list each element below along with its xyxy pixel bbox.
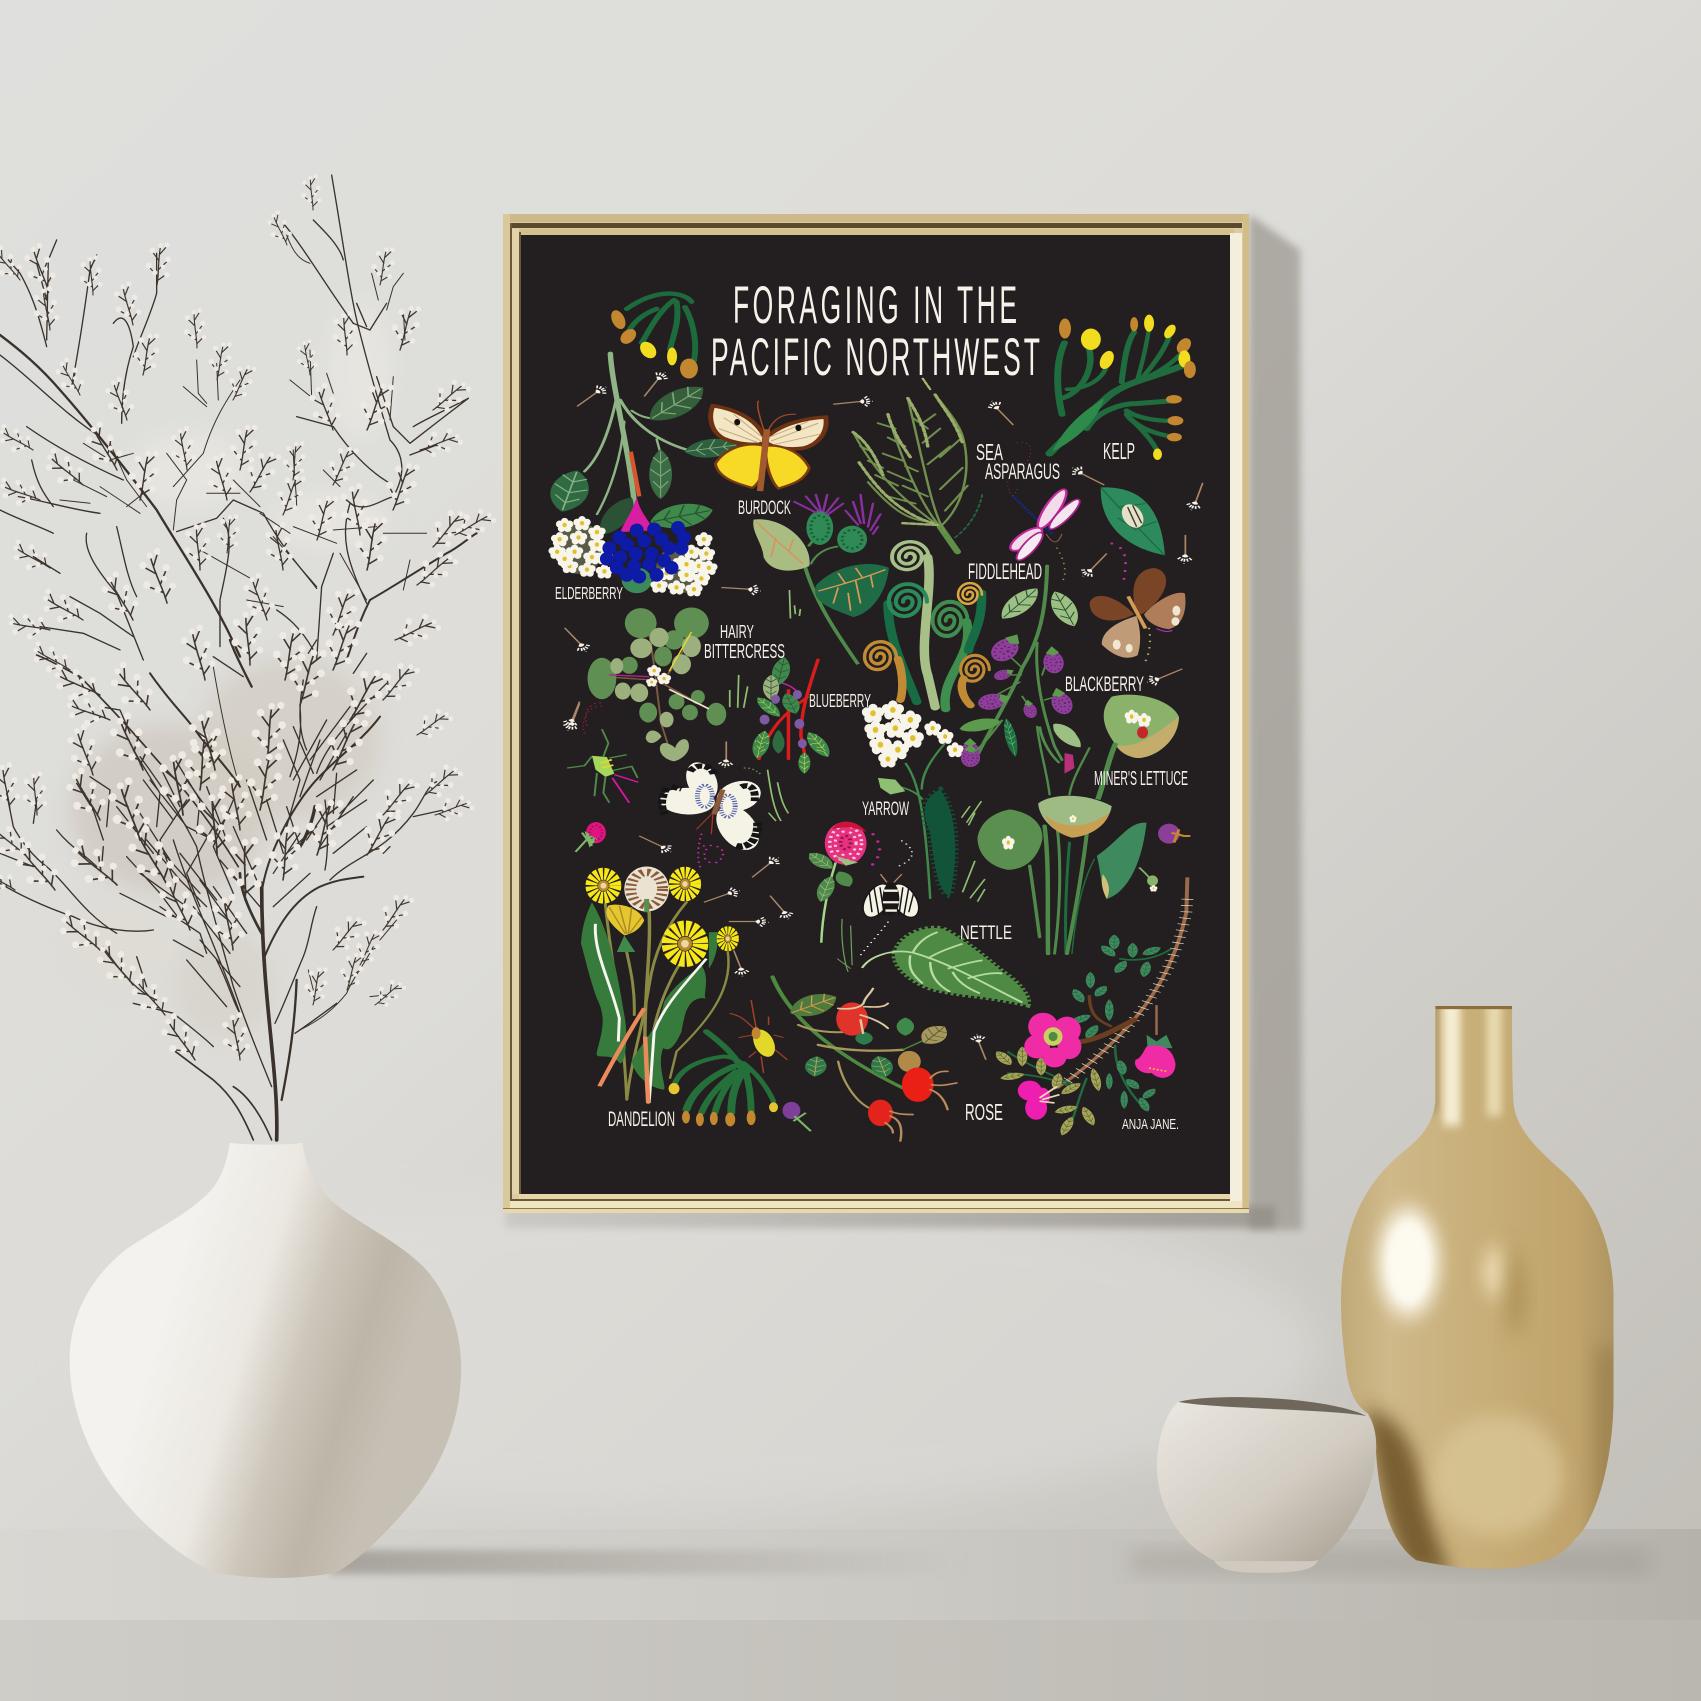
hairy bittercress (587, 607, 726, 760)
rose plant (992, 877, 1187, 1137)
plant name labels: BITTERCRESS (704, 641, 785, 663)
white elderflower clusters (548, 516, 718, 596)
blueberry lower leaves (753, 730, 832, 774)
poster title: FORAGING IN THE (733, 275, 1017, 334)
poster upper illustrations (544, 294, 1210, 761)
bowl and gold vase shelf shadow (1130, 1550, 1650, 1574)
kelp right (1050, 315, 1196, 460)
blue berries (600, 521, 691, 584)
brown butterfly (1090, 568, 1185, 658)
plant name labels: NETTLE (960, 923, 1012, 944)
berry by kelp (782, 1102, 811, 1131)
spider (562, 700, 638, 803)
bittercress heart leaf (641, 704, 726, 761)
pink trail dots upper (586, 442, 1150, 725)
poster title (711, 275, 1040, 386)
frame cast shadow (505, 214, 1302, 1230)
plant name labels (555, 438, 1188, 1133)
plant name labels: ROSE (965, 1099, 1003, 1125)
plant name labels: YARROW (862, 799, 909, 820)
upper branches (0, 175, 477, 660)
shelf (0, 1529, 1701, 1701)
plant name labels: DANDELION (608, 1108, 675, 1131)
blossom haze (65, 300, 395, 1040)
wall soft light (80, 1190, 1320, 1510)
plant name labels: BLACKBERRY (1065, 673, 1144, 696)
plant name labels: SEA (976, 439, 1003, 465)
blackberry (957, 566, 1087, 761)
rose bud (1135, 1035, 1175, 1078)
white butterfly (658, 760, 770, 854)
pink rose second flower (1018, 1081, 1060, 1120)
plant name labels: BLUEBERRY (809, 691, 871, 711)
poster lower illustrations (562, 695, 1190, 1141)
miner's lettuce plant (977, 727, 1158, 954)
plant name labels: ANJA JANE. (1122, 1116, 1179, 1133)
bee (858, 874, 924, 919)
fiddleheads (865, 542, 989, 709)
trail dots lower (698, 834, 912, 957)
plant name labels: HAIRY (720, 622, 754, 642)
poster title: PACIFIC NORTHWEST (711, 327, 1040, 386)
rose hips branch (773, 977, 957, 1141)
seed fluffs lower (635, 741, 994, 1061)
sea asparagus (853, 379, 982, 552)
miner's lettuce upper leaf with ladybird (1098, 695, 1179, 799)
beetle (730, 1000, 787, 1073)
white vase shelf shadow (330, 1550, 970, 1574)
gold vase (1341, 1006, 1614, 1569)
raspberry right (1158, 824, 1190, 844)
white ceramic vase (70, 1143, 461, 1578)
blossom sprigs (0, 174, 498, 1069)
dragonfly (1005, 487, 1084, 562)
plant name labels: KELP (1103, 438, 1135, 464)
raspberry left (576, 822, 606, 852)
dried branches in vase (0, 174, 498, 1140)
picture frame with poster (503, 214, 1249, 1213)
leaf with beetle (1101, 487, 1165, 555)
plant name labels: BURDOCK (738, 498, 791, 519)
poster background (521, 235, 1230, 1194)
grass ticks lower (744, 768, 985, 972)
yarrow flowers and stem (862, 700, 963, 899)
plant name labels: ELDERBERRY (555, 583, 623, 603)
plant name labels: MINER'S LETTUCE (1094, 768, 1188, 790)
seed fluffs upper (558, 369, 1210, 732)
gold frame (503, 214, 1249, 1213)
kelp top left (609, 294, 698, 379)
grass ticks (730, 590, 800, 708)
lower branches (0, 640, 443, 1140)
dandelion group (581, 866, 735, 1103)
kelp lower (669, 1032, 778, 1126)
yellow butterfly (711, 401, 826, 491)
pink rose flower (1024, 1013, 1081, 1067)
elderberry plant (544, 354, 740, 596)
nettle (862, 928, 1028, 1005)
blackberry lower leaves (959, 719, 1083, 774)
small ceramic bowl (1157, 1397, 1376, 1573)
plant name labels: FIDDLEHEAD (968, 559, 1042, 584)
plant name labels: ASPARAGUS (985, 459, 1060, 484)
clover (803, 822, 867, 943)
blueberry (749, 656, 835, 760)
burdock (753, 495, 889, 664)
